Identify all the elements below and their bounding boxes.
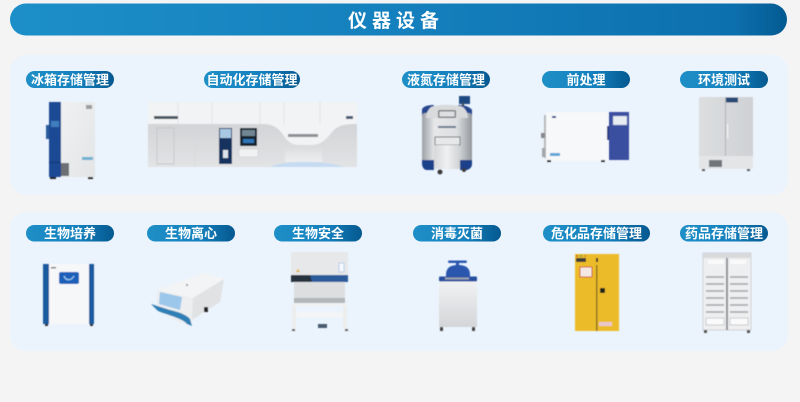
- label: 生物安全: 生物安全: [292, 226, 344, 241]
- label: 生物离心: 生物离心: [165, 226, 217, 241]
- panel: storage and environment row: [10, 55, 788, 195]
- label: 消毒灭菌: 消毒灭菌: [431, 226, 483, 241]
- label: 液氮存储管理: 液氮存储管理: [407, 72, 485, 87]
- title banner: 仪器设备: [348, 10, 444, 32]
- label: 生物培养: [26, 225, 114, 242]
- icon: pre-processing instrument: [541, 112, 629, 162]
- icon: liquid nitrogen tank: [422, 96, 472, 174]
- label: 前处理: 前处理: [566, 72, 606, 87]
- icon: pharmaceutical refrigerator: [703, 253, 751, 333]
- title banner: [10, 4, 787, 36]
- icon: autoclave: [439, 260, 477, 331]
- icon: biosafety cabinet: [291, 252, 348, 331]
- icon: hazardous chemical cabinet: [575, 254, 619, 331]
- icon: environmental test chamber: [699, 97, 753, 171]
- label: 生物安全: [274, 225, 362, 242]
- label: 消毒灭菌: [413, 225, 501, 242]
- panel: laboratory equipment row: [10, 212, 788, 351]
- label: 生物离心: [147, 225, 235, 242]
- icon: automated storage system: [148, 102, 357, 167]
- label: 危化品存储管理: 危化品存储管理: [551, 226, 642, 241]
- label: 前处理: [542, 71, 630, 88]
- label: 冰箱存储管理: 冰箱存储管理: [31, 72, 109, 87]
- icon: CO2 incubator: [43, 264, 94, 326]
- label: 生物培养: 生物培养: [44, 226, 96, 241]
- label: 药品存储管理: 药品存储管理: [685, 226, 763, 241]
- label: 自动化存储管理: 自动化存储管理: [206, 72, 298, 87]
- icon: centrifuge: [151, 273, 224, 326]
- icon: ultra-low freezer: [46, 102, 95, 179]
- label: 环境测试: [680, 71, 768, 88]
- label: 环境测试: 环境测试: [698, 72, 750, 87]
